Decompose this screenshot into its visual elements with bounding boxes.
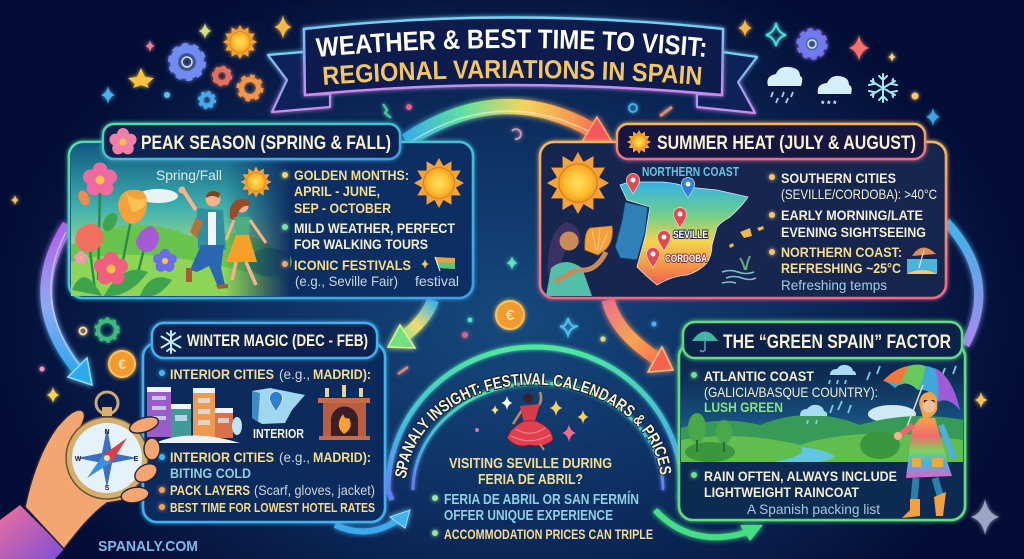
text: pack layers bbox=[170, 482, 375, 498]
text: southern cities bbox=[781, 170, 937, 202]
text: golden months: APRIL - JUNE, bbox=[294, 183, 380, 199]
text: interior cities biting cold: BITING COLD bbox=[170, 465, 251, 481]
ribbon tails bbox=[268, 52, 757, 113]
panel: green spain bbox=[679, 322, 965, 520]
text: northern coast: NORTHERN COAST: bbox=[781, 244, 902, 260]
text: mild weather: MILD WEATHER, PERFECT bbox=[294, 220, 455, 236]
title line 1: WEATHER & BEST TIME TO VISIT: bbox=[315, 29, 706, 57]
text: interior cities biting cold: (e.g., bbox=[279, 449, 310, 465]
label: festival: festival bbox=[415, 273, 459, 289]
heading: summer heat: SUMMER HEAT (JULY & AUGUST) bbox=[657, 133, 916, 154]
icon: beach umbrella bbox=[907, 247, 937, 274]
text: rain often bbox=[704, 468, 897, 500]
illustration: hand holding compass: W bbox=[75, 456, 82, 463]
text: packing list: A Spanish packing list bbox=[747, 501, 880, 517]
icon: snow cloud: * * * bbox=[821, 99, 837, 109]
bullets summer bbox=[769, 174, 775, 255]
map: interior spain bbox=[252, 388, 305, 424]
couple walking bbox=[178, 186, 266, 289]
text: feria experience: FERIA DE ABRIL OR SAN FERMÍN bbox=[444, 491, 639, 508]
illustration: green landscape bbox=[681, 372, 963, 462]
heading: curved insight title: SPANALY INSIGHT: FESTIVAL CALENDARS & PRICES bbox=[394, 372, 672, 479]
text: golden months: SEP - OCTOBER bbox=[294, 200, 391, 216]
text: interior cities biting cold bbox=[170, 449, 371, 481]
arrow: summer to green spain lower bbox=[608, 300, 673, 372]
text: iconic festivals bbox=[294, 257, 411, 289]
icon: water reeds bbox=[722, 256, 756, 283]
decoration: top-left gears, stars and sun bbox=[101, 15, 292, 108]
panel: summer heat bbox=[540, 124, 946, 298]
illustration: spring walk scene bbox=[71, 144, 292, 296]
illustration: hand holding compass: E bbox=[134, 456, 139, 463]
text: visiting seville question bbox=[449, 456, 612, 488]
decoration: top-right weather icons bbox=[738, 19, 940, 126]
panel: peak season bbox=[69, 124, 473, 298]
label: interior: INTERIOR bbox=[253, 426, 304, 441]
text: interior cities top: MADRID): bbox=[313, 366, 371, 382]
arrow: summer to green spain bbox=[946, 222, 979, 345]
flowers bbox=[72, 162, 177, 296]
icon: euro coin top bbox=[496, 301, 524, 329]
text: visiting seville question: VISITING SEVILLE DURING bbox=[449, 456, 612, 472]
icon: big sun bbox=[547, 152, 609, 214]
heading: peak season bbox=[103, 124, 400, 159]
panel: winter magic bbox=[143, 323, 385, 522]
heading: winter magic: WINTER MAGIC (DEC - FEB) bbox=[187, 331, 368, 350]
ribbon body bbox=[304, 18, 723, 95]
arrow: winter to insight bbox=[335, 510, 410, 531]
icon: euro coin top: € bbox=[506, 307, 515, 324]
text: atlantic coast: ATLANTIC COAST bbox=[704, 368, 814, 384]
text: interior cities top bbox=[170, 366, 371, 382]
icon: euro coin left bbox=[109, 351, 135, 377]
illustration: girl with umbrella and raincoat bbox=[883, 364, 960, 518]
text: accommodation prices: ACCOMMODATION PRICES CAN TRIPLE bbox=[444, 526, 653, 542]
icon: snow cloud bbox=[818, 76, 852, 109]
label: northern coast: NORTHERN COAST bbox=[642, 164, 739, 179]
arrow: rainbow peak to summer bbox=[406, 106, 612, 142]
icon: snowflake bbox=[869, 74, 897, 102]
text: golden months bbox=[294, 167, 409, 216]
heading: winter magic bbox=[152, 323, 377, 358]
map: spain heat map bbox=[615, 174, 764, 285]
heading: peak season: PEAK SEASON (SPRING & FALL) bbox=[141, 133, 391, 154]
icon: euro coin left: € bbox=[118, 356, 126, 372]
illustration: snowy town bbox=[147, 387, 242, 443]
text: interior cities biting cold: INTERIOR CITIES bbox=[170, 449, 274, 465]
illustration: hand holding compass: S bbox=[105, 485, 110, 492]
bullets green spain bbox=[691, 372, 697, 478]
text: best time: BEST TIME FOR LOWEST HOTEL RATES bbox=[170, 500, 375, 515]
text: pack layers: PACK LAYERS bbox=[170, 482, 250, 498]
icon: small sun bbox=[240, 166, 272, 198]
text: interior cities top: (e.g., bbox=[279, 366, 310, 382]
heading: green spain bbox=[683, 322, 962, 358]
icon: rain cloud bbox=[767, 67, 802, 103]
text: feria experience: OFFER UNIQUE EXPERIENCE bbox=[444, 508, 613, 524]
heading: green spain: THE “GREEN SPAIN” FACTOR bbox=[723, 332, 951, 353]
bullets insight bbox=[432, 495, 438, 536]
brand: spanaly.com: SPANALY.COM bbox=[98, 538, 198, 555]
heading: summer heat bbox=[617, 124, 925, 159]
text: interior cities biting cold: MADRID): bbox=[313, 449, 371, 465]
bullets peak season bbox=[282, 172, 288, 267]
text: atlantic coast: (GALICIA/BASQUE COUNTRY): bbox=[704, 384, 878, 400]
text: atlantic coast bbox=[704, 368, 878, 415]
text: early morning: EARLY MORNING/LATE bbox=[781, 207, 923, 223]
text: iconic festivals: ICONIC FESTIVALS bbox=[294, 257, 411, 273]
text: visiting seville question: FERIA DE ABRIL? bbox=[478, 472, 583, 488]
text: pack layers: (Scarf, gloves, jacket) bbox=[254, 482, 375, 498]
text: iconic festivals: (e.g., Seville Fair) bbox=[295, 273, 398, 289]
label: cordoba: CORDOBA bbox=[665, 253, 707, 265]
icon: big sun bbox=[414, 158, 464, 208]
label: seville: SEVILLE bbox=[673, 229, 708, 241]
text: northern coast: Refreshing temps bbox=[781, 277, 887, 293]
panel: spanaly insight bbox=[382, 341, 678, 542]
text: early morning: EVENING SIGHTSEEING bbox=[781, 224, 926, 240]
title ribbon bbox=[264, 12, 760, 118]
text: southern cities: SOUTHERN CITIES bbox=[781, 170, 896, 186]
illustration: flamenco dancer bbox=[475, 392, 589, 450]
illustration: woman with fan bbox=[546, 222, 612, 296]
arrow: peak to winter bbox=[388, 300, 433, 348]
title line 2: REGIONAL VARIATIONS IN SPAIN bbox=[323, 60, 702, 85]
text: golden months: GOLDEN MONTHS: bbox=[294, 167, 409, 183]
text: rain often: LIGHTWEIGHT RAINCOAT bbox=[704, 484, 859, 500]
illustration: fireplace bbox=[318, 385, 370, 440]
text: southern cities: (SEVILLE/CORDOBA): >40°C bbox=[781, 186, 937, 202]
text: atlantic coast: LUSH GREEN bbox=[704, 399, 783, 415]
text: interior cities top: INTERIOR CITIES bbox=[170, 366, 274, 382]
arrow: insight to green spain bbox=[655, 510, 763, 541]
icon: festival flag bbox=[421, 257, 455, 271]
text: mild weather: FOR WALKING TOURS bbox=[294, 236, 428, 252]
arrow: peak to compass bbox=[46, 225, 92, 385]
icon: rain clouds bbox=[800, 365, 956, 424]
text: feria experience bbox=[444, 491, 639, 524]
text: northern coast bbox=[781, 244, 902, 293]
illustration: hand holding compass: N bbox=[104, 429, 110, 436]
text: northern coast: REFRESHING ~25°C bbox=[781, 260, 901, 276]
text: early morning bbox=[781, 207, 926, 240]
illustration: hand holding compass bbox=[0, 392, 160, 559]
text: mild weather bbox=[294, 220, 455, 252]
label: spring/fall: Spring/Fall bbox=[156, 167, 222, 183]
bullets winter bbox=[159, 370, 165, 510]
text: rain often: RAIN OFTEN, ALWAYS INCLUDE bbox=[704, 468, 897, 484]
confetti decorations bbox=[11, 104, 999, 535]
